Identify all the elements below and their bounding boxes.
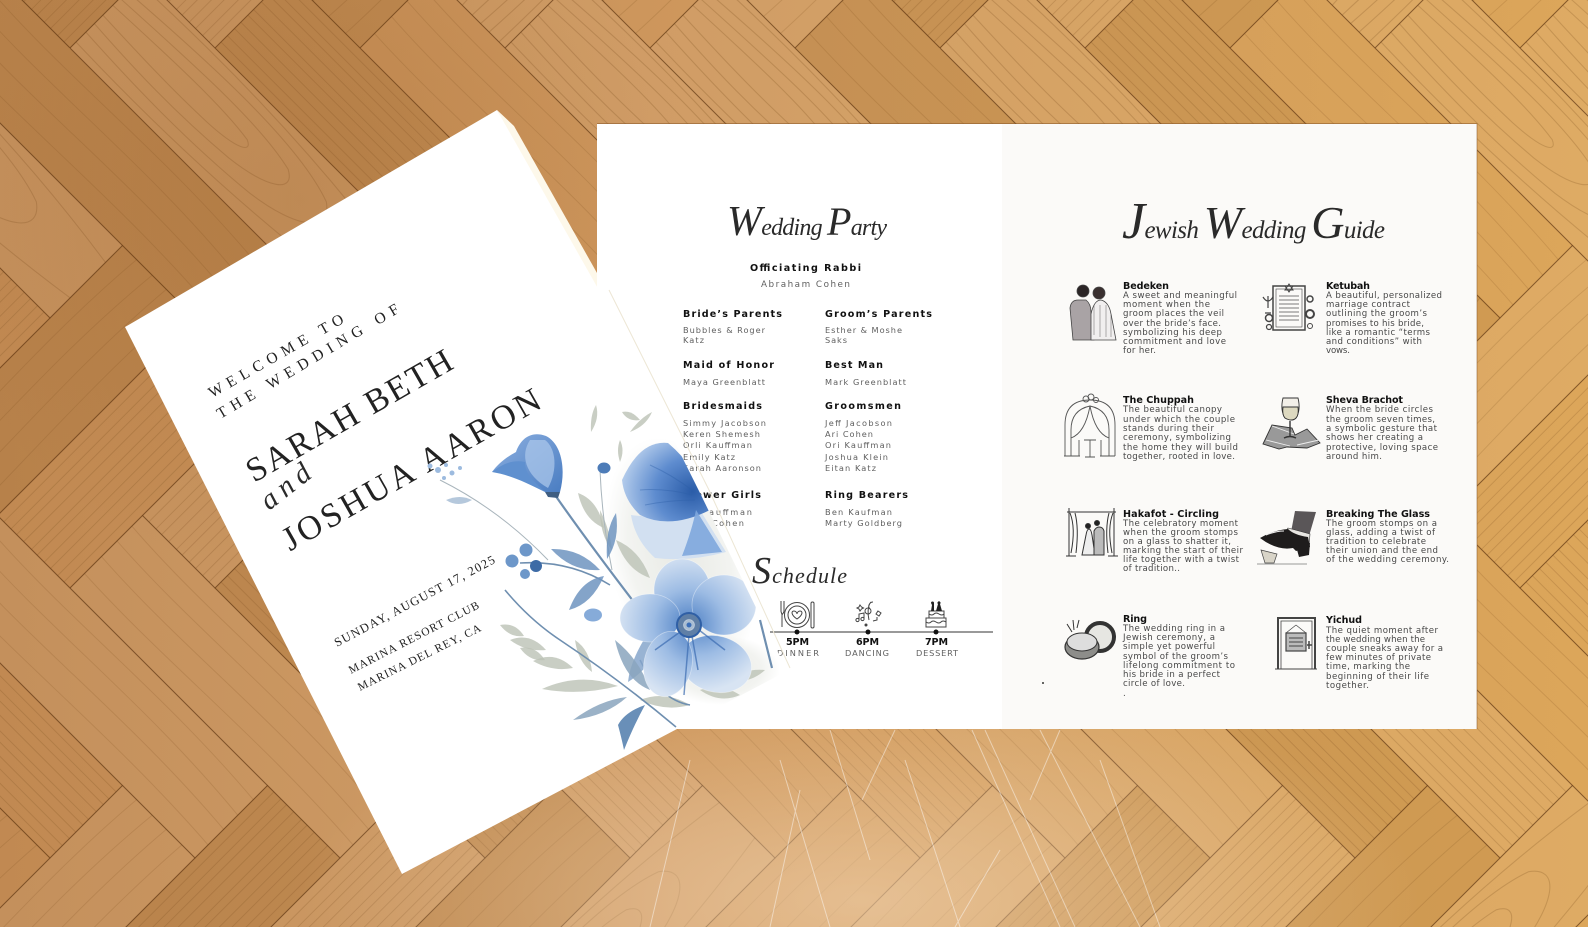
guide item: Sheva Brachot: a symbolic gesture that <box>1326 424 1438 434</box>
cover names: and <box>254 457 318 517</box>
guide item: Bedeken: for her. <box>1123 346 1156 356</box>
guide item: The Chuppah: the home they will build <box>1123 443 1238 453</box>
bride side column: Emily Katz <box>683 452 735 462</box>
guide item: Ring: Jewish ceremony, a <box>1122 633 1215 643</box>
stems <box>440 470 772 727</box>
groom side column: Saks <box>825 335 847 345</box>
guide item: Sheva Brachot: shows her creating a <box>1326 433 1423 443</box>
guide item: Ring <box>1065 614 1235 699</box>
groom side column: Best Man <box>825 360 883 371</box>
guide item: The Chuppah: stands during their <box>1123 424 1214 434</box>
cover date and venue: MARINA RESORT CLUB <box>347 600 482 677</box>
stray dot <box>1042 682 1044 684</box>
guide item: The Chuppah <box>1064 394 1238 462</box>
guide item: Breaking The Glass: Breaking The Glass <box>1326 509 1430 520</box>
bride side column <box>683 309 782 528</box>
guide item: Bedeken: Bedeken <box>1123 281 1169 292</box>
gray leaves <box>500 405 765 708</box>
guide item: Hakafot - Circling: when the groom stomps <box>1123 528 1239 538</box>
guide item: Ring: simple yet powerful <box>1123 642 1215 652</box>
guide item: Bedeken <box>1070 281 1237 356</box>
guide item: Sheva Brachot: When the bride circles <box>1326 405 1434 415</box>
cover date and venue <box>332 553 497 694</box>
guide item: Ring: The wedding ring in a <box>1122 624 1225 634</box>
schedule heading: Schedule <box>752 550 847 592</box>
groom side column: Marty Goldberg <box>825 518 902 528</box>
guide item: Bedeken: over the bride’s face. <box>1123 319 1221 329</box>
groom side column: Ring Bearers <box>825 490 908 501</box>
small blue blossoms <box>506 544 542 579</box>
guide item: Breaking The Glass: The groom stomps on a <box>1325 519 1437 529</box>
guide item: Yichud: together. <box>1326 681 1369 691</box>
guide item: Hakafot - Circling: marking the start of their <box>1123 546 1243 556</box>
groom side column <box>824 309 932 528</box>
guide item: Yichud: couple sneaks away for a <box>1326 644 1443 654</box>
bride side column: Kauffman <box>702 507 752 517</box>
cover intro text: THE WEDDING OF <box>214 301 402 422</box>
icon: couple <box>1070 285 1116 340</box>
groom side column: Ori Kauffman <box>825 440 891 450</box>
bride side column: Bride’s Parents <box>683 309 782 320</box>
cover date and venue: SUNDAY, AUGUST 17, 2025 <box>332 553 497 650</box>
bride side column: Orli Kauffman <box>683 440 752 450</box>
7pm dessert <box>916 637 959 658</box>
guide item: The Chuppah: The beautiful canopy <box>1122 405 1222 415</box>
guide item: Breaking The Glass <box>1257 509 1449 565</box>
icon: ketubah scroll <box>1263 284 1314 330</box>
guide item: Ketubah: Ketubah <box>1326 281 1370 292</box>
program cover <box>125 110 787 874</box>
guide item: Ketubah: promises to his bride, <box>1326 319 1424 329</box>
bride side column: Katz <box>683 335 704 345</box>
cover names: JOSHUA AARON <box>276 382 548 558</box>
guide item: Ring: symbol of the groom’s <box>1123 652 1229 662</box>
icon: wedding rings <box>1065 620 1114 659</box>
guide item: Sheva Brachot: the groom seven times, <box>1326 415 1435 425</box>
guide item: Ring: his bride in a perfect <box>1123 670 1221 680</box>
guide item: Bedeken: groom places the veil <box>1123 309 1224 319</box>
5pm dinner: DINNER <box>777 648 819 658</box>
pale wash behind flowers <box>618 492 770 699</box>
cover date and venue: MARINA DEL REY, CA <box>356 622 484 694</box>
groom side column: Groom’s Parents <box>825 309 932 320</box>
open program spread <box>125 110 1477 874</box>
schedule timeline <box>770 601 993 658</box>
bride side column: Bubbles & Roger <box>683 325 766 335</box>
guide item: Breaking The Glass: glass, adding a twist of <box>1326 528 1436 538</box>
groom side column: Groomsmen <box>825 401 901 412</box>
guide heading: Jewish Wedding Guide <box>1122 193 1385 250</box>
bride side column: Cohen <box>712 518 744 528</box>
icon: shoe stomping glass <box>1257 511 1316 564</box>
watercolor floral bouquet <box>428 405 780 750</box>
guide item: Hakafot - Circling: Hakafot - Circling <box>1123 509 1219 520</box>
guide item: The Chuppah: The Chuppah <box>1123 395 1194 406</box>
guide item: Sheva Brachot: around him. <box>1326 452 1382 462</box>
groom side column: Esther & Moshe <box>825 325 902 335</box>
guide item: Ring: circle of love. <box>1123 679 1185 689</box>
guide item: Hakafot - Circling: life together with a twist <box>1123 555 1240 565</box>
groom side column: Ari Cohen <box>825 429 873 439</box>
wedding party heading: Wedding Party <box>727 199 887 245</box>
guide item: Ring: . <box>1123 689 1126 699</box>
guide item: Yichud: beginning of their life <box>1326 672 1429 682</box>
bride side column: Sarah Aaronson <box>683 463 761 473</box>
right page <box>1002 124 1477 729</box>
groom side column: Joshua Klein <box>824 452 888 462</box>
guide item: Sheva Brachot <box>1263 395 1438 462</box>
guide item: Breaking The Glass: tradition to celebrate <box>1326 537 1426 547</box>
left page <box>597 124 1002 729</box>
guide item: Ketubah: outlining the groom’s <box>1326 309 1428 319</box>
guide item: Yichud: Yichud <box>1325 615 1362 626</box>
cover intro text: WELCOME TO <box>206 311 347 401</box>
icon: door with sign <box>1275 618 1317 669</box>
guide item: Sheva Brachot: Sheva Brachot <box>1326 395 1403 406</box>
7pm dessert: 7PM <box>925 637 948 648</box>
groom side column: Eitan Katz <box>825 463 876 473</box>
blue leaves <box>551 513 652 750</box>
guide item: Ketubah: and conditions” with <box>1326 337 1422 347</box>
icon: chuppah arch <box>1064 394 1115 457</box>
7pm dessert: DESSERT <box>916 648 959 658</box>
guide item: Ketubah: A beautiful, personalized <box>1326 291 1442 301</box>
large anemone flower <box>620 559 758 701</box>
guide item: Yichud: time, marking the <box>1326 662 1410 672</box>
guide item: Hakafot - Circling: on a glass to shatter it, <box>1123 537 1231 547</box>
guide item: Breaking The Glass: of the wedding ceremony. <box>1326 555 1449 565</box>
guide item: The Chuppah: under which the couple <box>1123 415 1235 425</box>
officiating rabbi: Abraham Cohen <box>761 280 850 290</box>
guide item: Bedeken: symbolizing his deep <box>1123 328 1222 338</box>
guide item: Hakafot - Circling <box>1066 508 1243 574</box>
guide item: Ketubah: vows. <box>1326 346 1350 356</box>
groom side column: Jeff Jacobson <box>824 418 892 428</box>
guide item: The Chuppah: ceremony, symbolizing <box>1123 433 1231 443</box>
guide item: Hakafot - Circling: The celebratory moment <box>1122 519 1239 529</box>
bride side column: Maya Greenblatt <box>683 377 766 387</box>
cover names: SARAH BETH <box>240 343 459 490</box>
6pm dancing: DANCING <box>845 648 889 658</box>
bride side column: Keren Shemesh <box>683 429 760 439</box>
flower buds <box>584 462 610 622</box>
guide item: Bedeken: commitment and love <box>1123 337 1226 347</box>
guide item: Sheva Brachot: protective, loving space <box>1326 443 1438 453</box>
5pm dinner: 5PM <box>786 637 809 648</box>
guide item: The Chuppah: together, rooted in love. <box>1123 452 1235 462</box>
guide item: Ketubah: marriage contract <box>1326 300 1411 310</box>
icon: music notes <box>856 602 881 626</box>
guide item: Yichud: The quiet moment after <box>1325 626 1438 636</box>
icon: couple under canopy <box>1066 508 1118 556</box>
6pm dancing <box>845 637 889 658</box>
guide item: Hakafot - Circling: of tradition.. <box>1123 564 1180 574</box>
5pm dinner <box>777 637 819 658</box>
guide item: Ketubah: like a romantic “terms <box>1326 328 1431 338</box>
bride side column: Simmy Jacobson <box>683 418 766 428</box>
groom side column: Mark Greenblatt <box>825 377 907 387</box>
groom side column: Ben Kaufman <box>825 507 892 517</box>
right flower <box>622 443 726 559</box>
icon: dinner plate <box>781 601 814 628</box>
bride side column: Maid of Honor <box>683 360 774 371</box>
icon: wedding cake <box>926 601 946 627</box>
guide item: Bedeken: moment when the <box>1123 300 1210 310</box>
guide item: Ring: lifelong commitment to <box>1123 661 1235 671</box>
guide item: Yichud: few minutes of private <box>1326 653 1431 663</box>
guide item: Yichud: the wedding when the <box>1326 635 1425 645</box>
small blue sprig <box>428 463 472 504</box>
6pm dancing: 6PM <box>856 637 879 648</box>
guide item: Ketubah <box>1263 281 1442 356</box>
guide item: Yichud <box>1275 615 1443 691</box>
officiating rabbi <box>750 263 861 290</box>
tulip flower <box>492 434 563 498</box>
guide item: Ring: Ring <box>1123 614 1147 625</box>
officiating rabbi: Officiating Rabbi <box>750 263 861 274</box>
icon: wine glass on book <box>1263 398 1320 449</box>
bride side column: Bridesmaids <box>683 401 762 412</box>
guide item: Bedeken: A sweet and meaningful <box>1123 291 1237 301</box>
back sheet of program <box>497 110 795 671</box>
bride side column: Flower Girls <box>683 490 761 501</box>
guide item: Breaking The Glass: their union and the end <box>1326 546 1438 556</box>
